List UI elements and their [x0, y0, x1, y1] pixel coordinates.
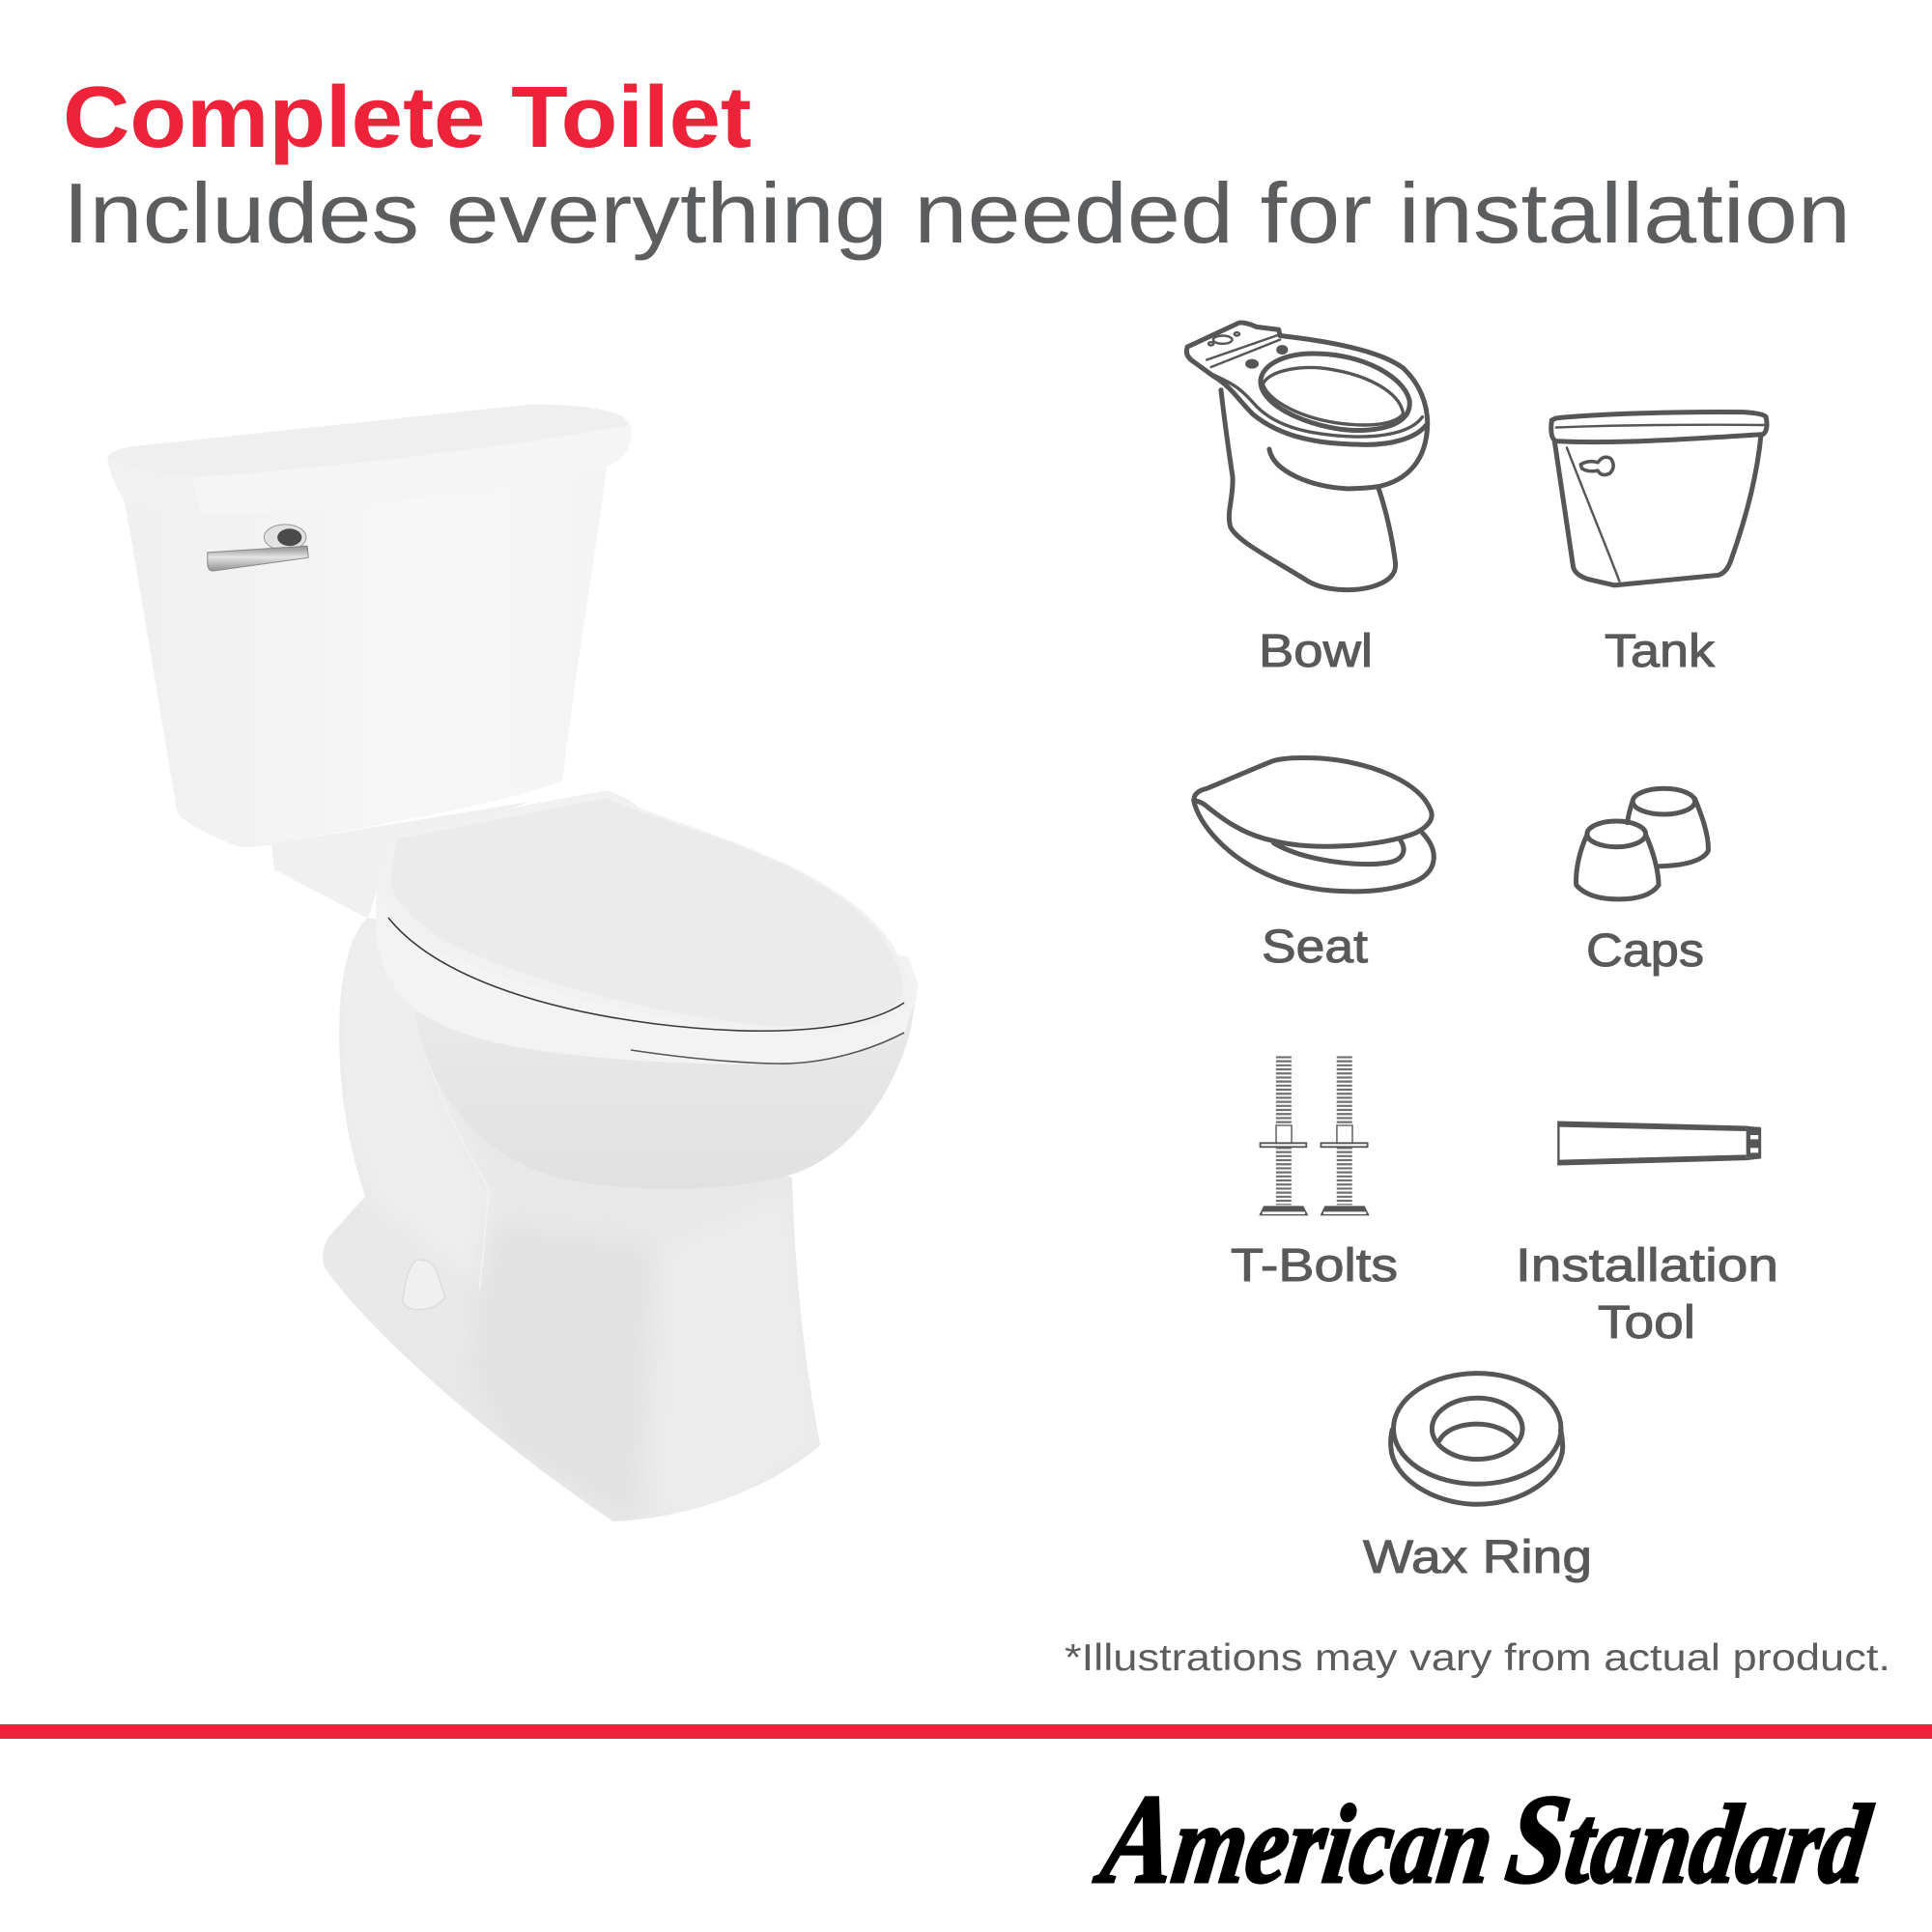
label: T-Bolts: T-Bolts	[1231, 1240, 1398, 1292]
lid left bevel	[107, 458, 202, 515]
seat ring and lid	[376, 790, 918, 1059]
toilet pedestal base	[323, 918, 820, 1521]
panel edge	[479, 1242, 485, 1289]
label: Seat: Seat	[1262, 922, 1368, 973]
rim	[376, 889, 919, 1065]
tank neck	[263, 802, 529, 919]
title: Complete Toilet	[63, 70, 752, 166]
label: Bowl: Bowl	[1259, 626, 1373, 677]
icon: caps	[1577, 788, 1708, 899]
lid top surface	[107, 405, 629, 478]
logo: American Standard	[1089, 1769, 1880, 1910]
icon: seat	[1194, 758, 1434, 892]
logo: American Standard: Standard	[1499, 1769, 1880, 1910]
label: Wax Ring: Wax Ring	[1363, 1532, 1592, 1583]
subtitle: Includes everything needed for installation	[63, 165, 1851, 261]
label: Installation Tool: Installation	[1516, 1240, 1778, 1292]
label: Installation Tool: Tool	[1598, 1297, 1695, 1349]
icon: bowl	[1186, 323, 1428, 590]
bolt right	[1321, 1056, 1370, 1215]
label: Tank: Tank	[1605, 626, 1716, 677]
bolt left	[1259, 1056, 1308, 1215]
red divider line	[0, 1724, 1932, 1739]
tank lid	[107, 405, 632, 515]
footnote: *Illustrations may vary from actual product.	[1065, 1637, 1890, 1679]
bolt cap	[403, 1260, 445, 1310]
logo: American Standard: American	[1089, 1769, 1503, 1910]
rim gap shadow line	[631, 1033, 904, 1064]
icon: tank	[1551, 412, 1767, 585]
label: Installation Tool	[1516, 1240, 1778, 1349]
label: Caps: Caps	[1586, 925, 1704, 977]
seat gap shadow line	[388, 918, 904, 1031]
tank body	[125, 467, 607, 847]
icon: wax ring	[1391, 1374, 1563, 1504]
flush handle	[208, 525, 308, 571]
icon: T-bolts	[1259, 1056, 1370, 1215]
icon: installation tool	[1558, 1122, 1760, 1164]
tank lid and body	[107, 405, 632, 847]
toilet product illustration	[107, 405, 919, 1560]
toilet bowl	[415, 966, 918, 1189]
